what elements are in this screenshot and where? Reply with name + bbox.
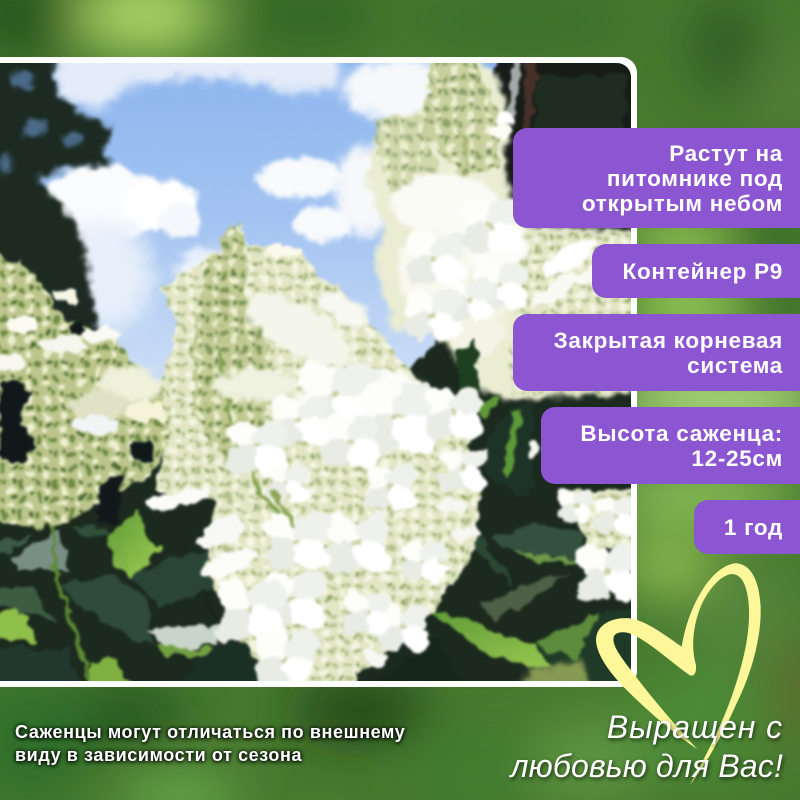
tag: seedling height bbox=[541, 407, 800, 484]
dark vertical leaves bbox=[453, 337, 534, 496]
dark foliage background bbox=[0, 330, 645, 700]
tag: container bbox=[592, 244, 800, 298]
tag: seedling height: 12-25см bbox=[691, 446, 783, 470]
right hydrangea panicle bbox=[365, 50, 645, 400]
dark tree bbox=[0, 63, 116, 333]
tag: age bbox=[694, 500, 800, 554]
tag: grown outdoors: Растут на bbox=[669, 140, 783, 166]
note: seedlings may differ: Саженцы могут отличаться по внешнему bbox=[15, 722, 405, 742]
building corner bbox=[491, 63, 631, 236]
tag: grown outdoors: питомнике под bbox=[607, 166, 783, 190]
slogan: Выращен с bbox=[607, 709, 783, 745]
dark gaps between left blossoms bbox=[0, 322, 152, 525]
central hydrangea panicle bbox=[144, 222, 492, 700]
left hydrangea panicle bbox=[0, 245, 175, 530]
tag: seedling height: Высота саженца: bbox=[580, 420, 783, 446]
sky bbox=[36, 63, 499, 384]
tag: root system bbox=[513, 314, 800, 391]
tag: grown outdoors bbox=[513, 128, 800, 228]
photo panel: white-framed hydrangea photograph bbox=[0, 57, 637, 687]
note: seedlings may differ bbox=[12, 722, 408, 769]
clouds bbox=[44, 63, 433, 334]
tag: age: 1 год bbox=[724, 514, 783, 540]
lower right flower cluster bbox=[526, 438, 631, 605]
slogan bbox=[508, 709, 786, 784]
slogan: любовью для Вас! bbox=[510, 748, 783, 784]
tag: root system: Закрытая корневая bbox=[554, 328, 783, 352]
tag: root system: система bbox=[687, 352, 783, 378]
lower right leaves bbox=[428, 522, 631, 681]
sky gaps in tree bbox=[0, 70, 81, 174]
left side leaves and stems bbox=[0, 508, 222, 681]
tag: container: Контейнер Р9 bbox=[623, 258, 783, 284]
note: seedlings may differ: виду в зависимости от сезона bbox=[15, 745, 302, 765]
tag: grown outdoors: открытым небом bbox=[582, 190, 783, 216]
